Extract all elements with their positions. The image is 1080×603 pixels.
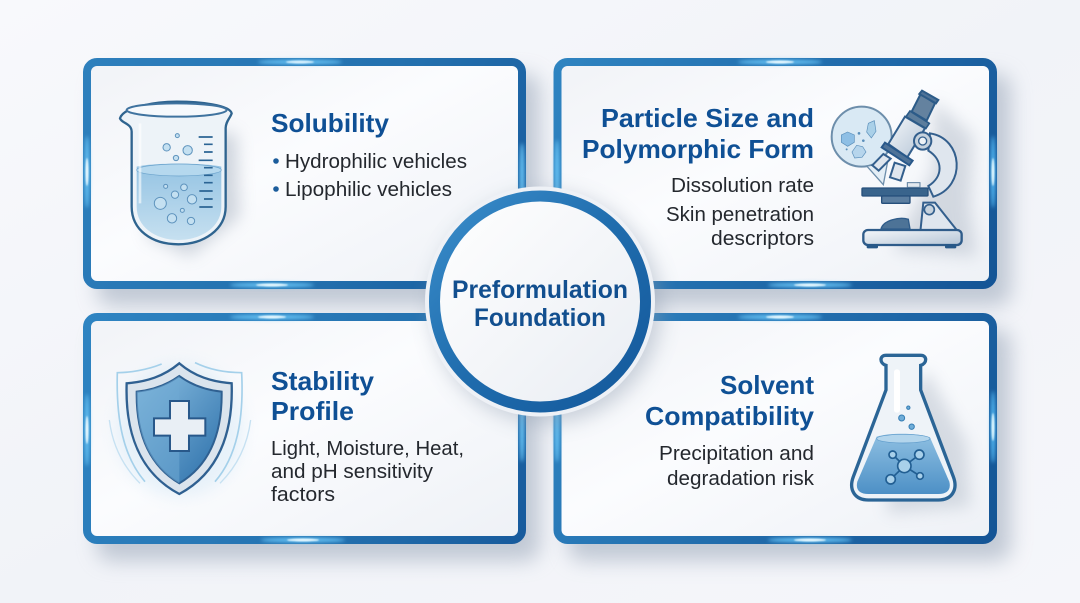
panel: solubility [84,60,540,306]
heading: particle size [582,103,814,164]
text: solvent body [659,443,815,490]
heading: particle size: Particle Size and [601,103,814,133]
icon: shield [109,363,251,497]
text: solvent body: Precipitation and [659,443,814,465]
heading: solubility: Solubility [271,108,390,138]
icon: microscope [832,91,977,257]
heading: solvent compatibility: Compatibility [645,401,815,431]
panel: stability [84,314,540,561]
text: stability body: factors [271,484,335,506]
heading: stability: Profile [271,396,354,426]
center title: Foundation [474,304,606,332]
text: stability body [271,438,464,506]
text: solubility list: Hydrophilic vehicles [285,151,467,173]
icon: flask [852,355,970,513]
text: stability body: Light, Moisture, Heat, [271,438,464,460]
center title: Preformulation [452,276,628,304]
heading: solvent compatibility [645,370,815,431]
text: particle size body [666,175,814,250]
heading: particle size: Polymorphic Form [582,134,814,164]
center circle [425,186,661,423]
heading: solvent compatibility: Solvent [720,370,814,400]
text: particle size body: Dissolution rate [671,175,814,197]
panel: particle size [554,60,1011,306]
text: particle size body: descriptors [711,228,814,250]
text: particle size body: Skin penetration [666,204,814,226]
center title [452,276,628,332]
heading: stability: Stability [271,366,375,396]
text: solubility list: Lipophilic vehicles [285,179,452,201]
icon: beaker [120,102,240,257]
text: solvent body: degradation risk [667,468,815,490]
text: solubility list [273,151,467,201]
heading: stability [271,366,375,426]
panel: solvent compatibility [554,314,1011,561]
text: stability body: and pH sensitivity [271,461,433,483]
